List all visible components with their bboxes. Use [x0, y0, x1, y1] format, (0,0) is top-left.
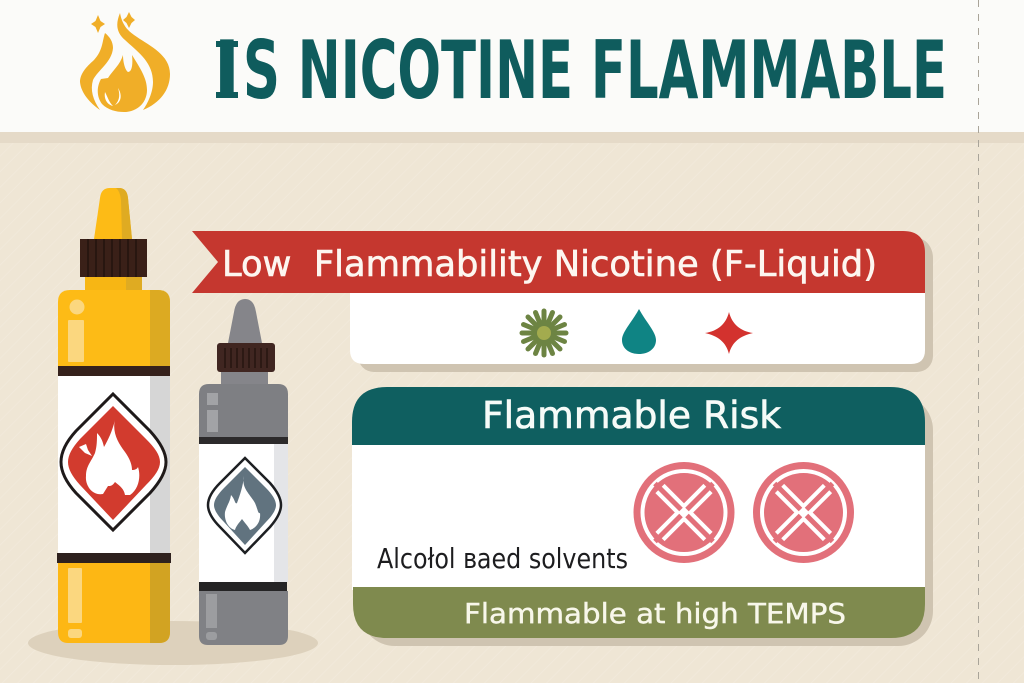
yellow bottle — [57, 188, 171, 643]
footer text: Flammable at high TEMPS — [464, 597, 846, 630]
panel: flammable risk — [352, 387, 933, 646]
banner text: Low Flammability Nicotine (F-Liquid) — [222, 244, 877, 285]
icon: x badge 1 — [634, 462, 734, 563]
icon: green flower — [522, 311, 566, 355]
footer: olive — [353, 587, 925, 638]
icon: header flame — [80, 12, 170, 112]
icon: teal drop — [622, 309, 656, 354]
icon: grey flame diamond — [208, 458, 281, 553]
heading text: Flammable Risk — [482, 394, 782, 437]
icon: x badge 2 — [753, 462, 854, 563]
panel: low flammability — [192, 231, 933, 372]
text: solvents: Alcołol ʙaed solvents — [377, 542, 628, 575]
banner: red ribbon heading — [192, 231, 925, 293]
bottle shadow — [28, 621, 318, 665]
icon: red flame diamond — [61, 394, 166, 530]
header: teal — [352, 387, 925, 445]
icon: red star — [705, 312, 753, 354]
title: I — [214, 24, 240, 117]
grey bottle — [199, 299, 288, 645]
